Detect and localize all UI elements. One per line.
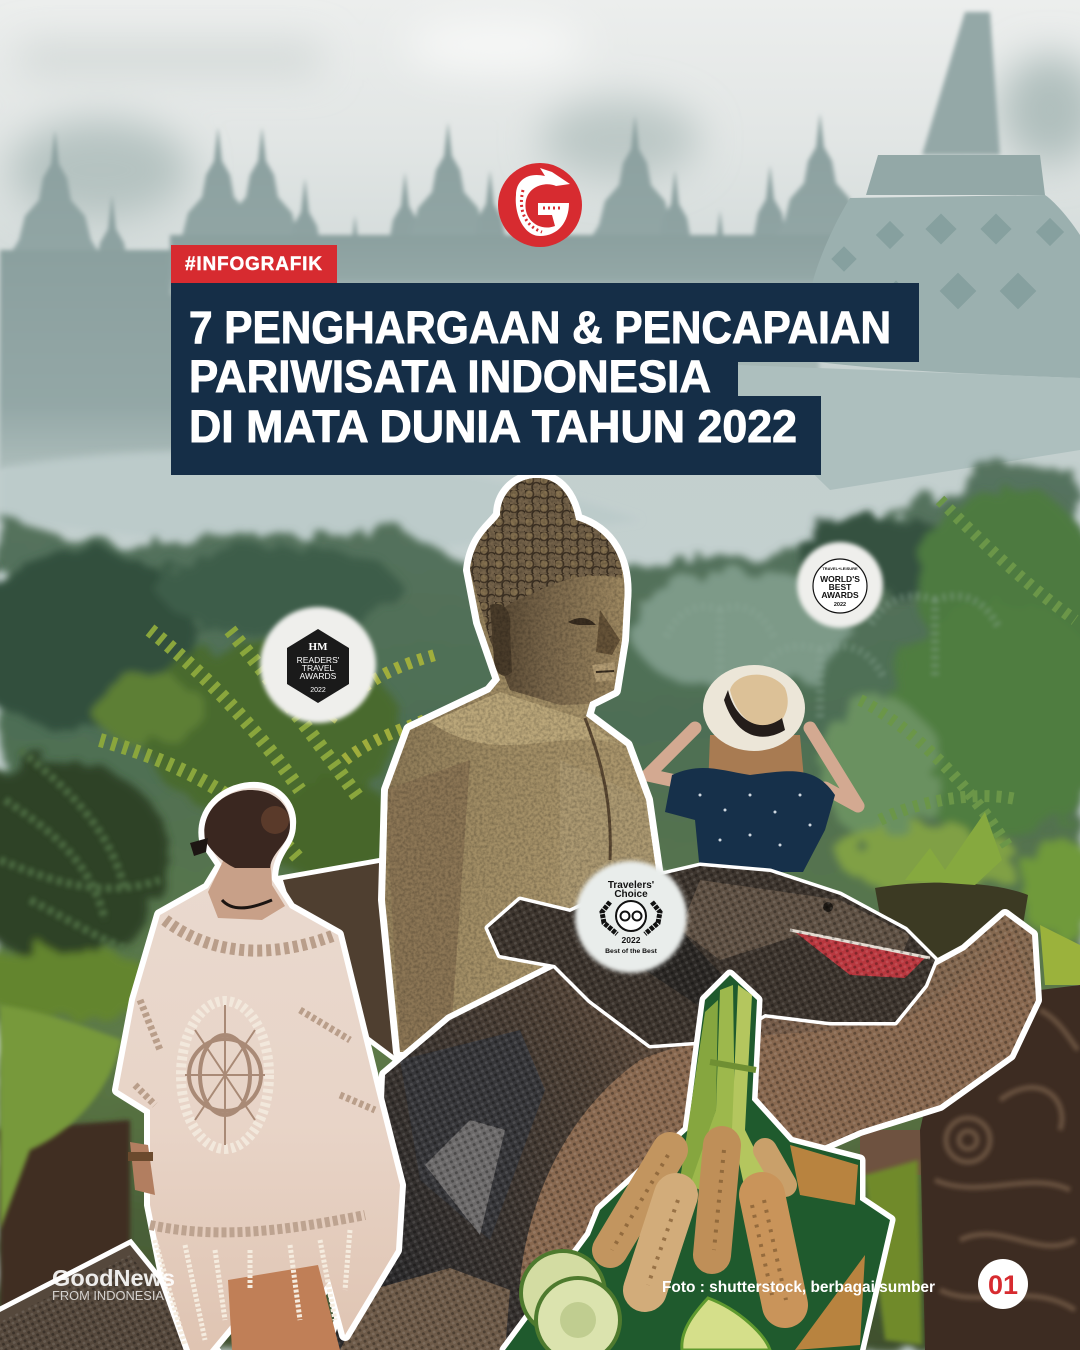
badge: HLM Readers' Travel Awards: HM <box>309 641 328 653</box>
badge: Travel + Leisure World's Best Awards: BEST <box>829 582 852 592</box>
badge: HLM Readers' Travel Awards: TRAVEL <box>302 663 334 673</box>
badge: HLM Readers' Travel Awards: 2022 <box>310 687 326 694</box>
title panel background <box>171 283 919 475</box>
wooden board <box>790 1145 865 1350</box>
lemongrass <box>680 985 770 1190</box>
cucumber slices <box>521 1251 620 1350</box>
mandala <box>181 1001 269 1149</box>
badge: HLM Readers' Travel Awards <box>260 607 376 723</box>
photo: woman in white poncho <box>118 788 400 1350</box>
title: 7 PENGHARGAAN & PENCAPAIAN <box>189 302 891 353</box>
page number <box>978 1259 1028 1309</box>
background: jungle <box>0 460 1080 1350</box>
ear <box>490 604 512 676</box>
hat <box>703 665 805 751</box>
hashtag tag <box>171 245 337 283</box>
photo: woman with straw hat <box>648 665 858 872</box>
curly hair <box>470 478 622 640</box>
fringe <box>150 1215 365 1232</box>
photo: Buddha statue <box>378 475 664 1058</box>
crochet yoke <box>165 920 335 951</box>
badge: Travel + Leisure World's Best Awards <box>797 542 883 628</box>
badge: Travel + Leisure World's Best Awards: WORLD'S <box>820 574 860 584</box>
watermark: GoodNews from Indonesia <box>52 1265 175 1303</box>
face <box>480 570 626 705</box>
photo: stone ledge behind Buddha <box>283 862 400 1060</box>
hashtag tag: #INFOGRAFIK <box>185 254 322 275</box>
photo: carved stone panel <box>860 985 1080 1350</box>
background: palm fronds <box>665 596 1000 720</box>
logo: GNFI garuda <box>498 163 582 247</box>
badge: Travel + Leisure World's Best Awards: AWARDS <box>821 590 859 600</box>
page number: 01 <box>988 1270 1018 1300</box>
badge: HLM Readers' Travel Awards: AWARDS <box>300 671 337 681</box>
background: sun glow and hazy trees <box>10 17 1080 220</box>
photo: plant pot <box>875 812 1080 990</box>
background: leafy branches <box>100 500 1075 860</box>
badge: Tripadvisor Travelers' Choice <box>575 861 687 973</box>
background: temple silhouettes <box>0 113 870 470</box>
badge: HLM Readers' Travel Awards: READERS' <box>297 655 340 665</box>
photo: Komodo head and foreleg <box>488 866 935 1045</box>
badge: Travel + Leisure World's Best Awards: TRAVEL+LEISURE <box>822 566 858 571</box>
background: large stupa <box>0 12 1080 560</box>
photo: Komodo tail, lower left <box>0 1245 215 1350</box>
photo: Komodo dragon body <box>330 900 1050 1350</box>
badge: Tripadvisor Travelers' Choice: Best of the Best <box>605 948 658 955</box>
badge: Tripadvisor Travelers' Choice: 2022 <box>622 935 641 945</box>
lime wedge <box>682 1298 770 1350</box>
title <box>189 302 891 452</box>
badge: Travel + Leisure World's Best Awards: 2022 <box>834 602 846 608</box>
hair <box>204 790 290 868</box>
badge: Tripadvisor Travelers' Choice: Choice <box>614 889 648 900</box>
satay sticks <box>610 1145 785 1305</box>
photo credit: Foto : shutterstock, berbagai sumber <box>662 1279 935 1296</box>
watermark: GoodNews from Indonesia: FROM INDONESIA <box>52 1289 165 1303</box>
title: DI MATA DUNIA TAHUN 2022 <box>189 401 797 452</box>
torso shade <box>385 760 470 1050</box>
badge: Tripadvisor Travelers' Choice: Travelers' <box>608 880 654 891</box>
facial features <box>568 618 596 625</box>
watermark: GoodNews from Indonesia: GoodNews <box>52 1265 175 1291</box>
background: wooden floor and leaf, lower left <box>0 1005 130 1320</box>
sunglasses <box>190 838 208 856</box>
photo: sate lilit on banana leaf <box>505 975 890 1350</box>
skin shoulders <box>208 855 285 920</box>
title: PARIWISATA INDONESIA <box>189 351 711 402</box>
